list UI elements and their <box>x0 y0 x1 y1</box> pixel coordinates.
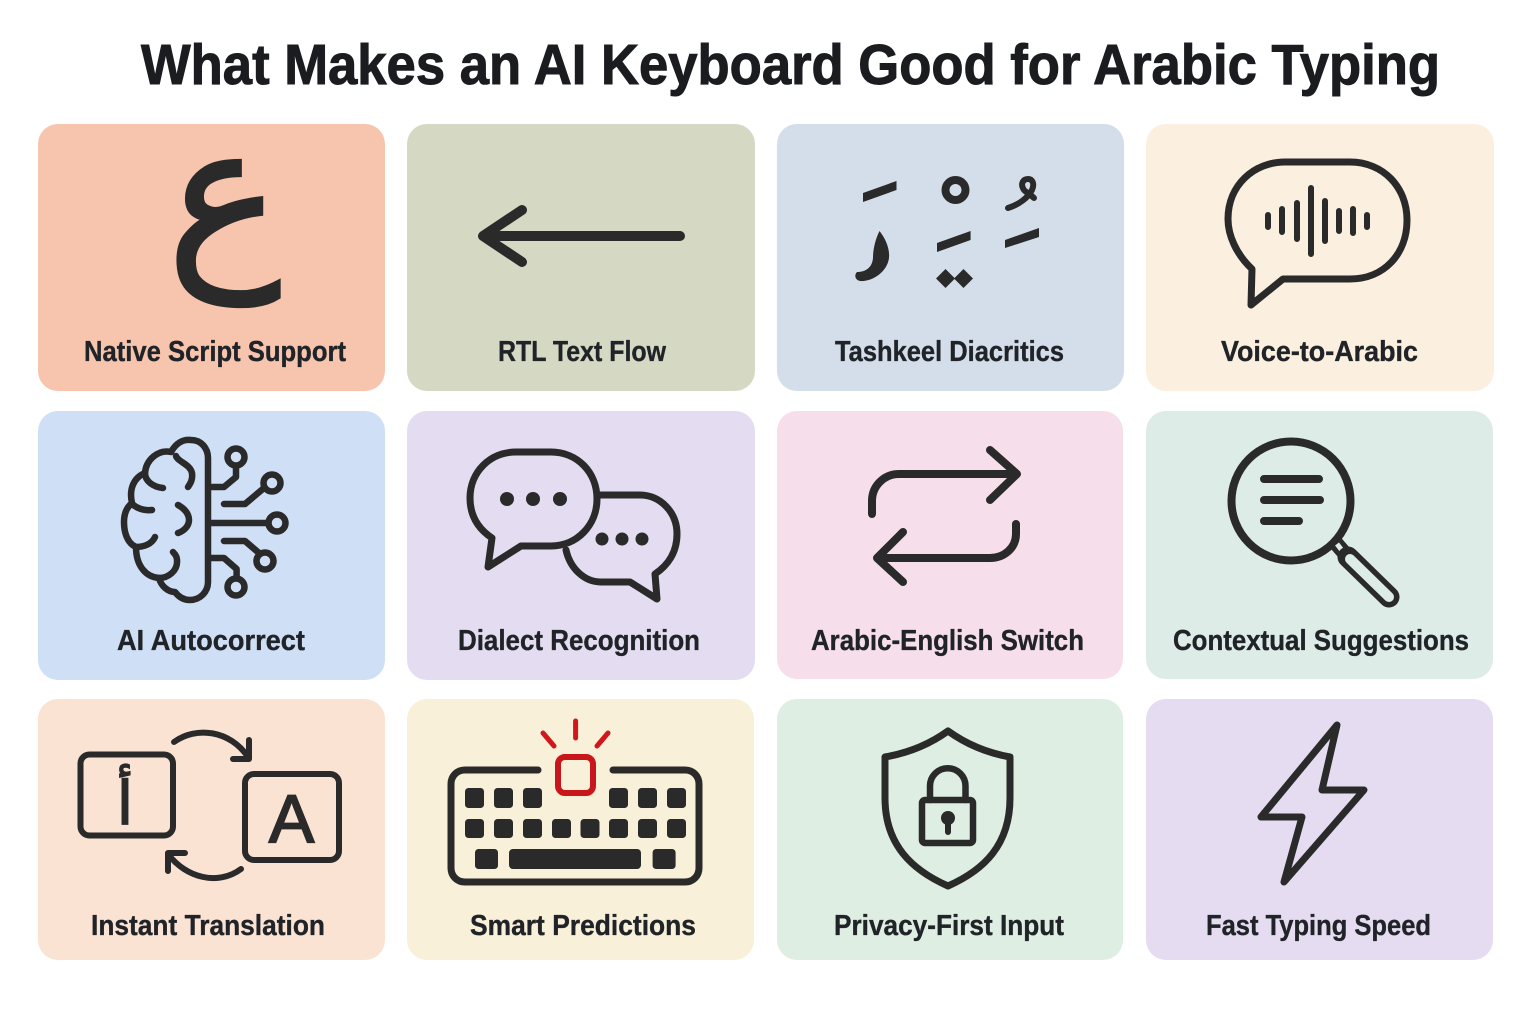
label: Privacy-First Input: Privacy-First Input <box>834 910 1064 942</box>
label: Fast Typing Speed: Fast Typing Speed <box>1206 910 1431 942</box>
title: What Makes an AI Keyboard Good for Arabic Typing <box>141 33 1440 97</box>
panel: Arabic-English Switch <box>777 411 1123 679</box>
icon: translation keys: أ <box>117 764 133 839</box>
icon: keyboard with highlighted key <box>451 721 699 882</box>
icon: translation keys: A <box>269 781 315 857</box>
panel: Fast Typing Speed <box>1146 699 1493 960</box>
icon: lightning bolt <box>1261 725 1364 882</box>
label: Native Script Support: Native Script Support <box>84 336 346 368</box>
icon: diacritic marks <box>855 179 1039 288</box>
label: Tashkeel Diacritics: Tashkeel Diacritics <box>835 336 1064 368</box>
icon: translation keys <box>80 733 339 878</box>
panel: Native Script Support <box>38 83 385 391</box>
panel: AI Autocorrect <box>38 411 385 680</box>
panel: Smart Predictions <box>407 699 754 960</box>
panel: Dialect Recognition <box>407 411 755 680</box>
icon: magnifying glass <box>1232 442 1389 597</box>
icon: AI brain circuit <box>124 440 286 600</box>
icon: two chat bubbles <box>470 452 677 599</box>
panel: Contextual Suggestions <box>1146 411 1493 679</box>
icon: left arrow <box>483 210 680 262</box>
panel: Privacy-First Input <box>777 699 1123 960</box>
panel: Instant Translation <box>38 699 385 960</box>
label: Voice-to-Arabic: Voice-to-Arabic <box>1221 336 1418 368</box>
label: Smart Predictions: Smart Predictions <box>470 910 696 942</box>
label: Arabic-English Switch: Arabic-English Switch <box>811 625 1084 657</box>
panel: Voice-to-Arabic <box>1146 124 1494 391</box>
icon: switch arrows <box>872 450 1017 582</box>
panel: RTL Text Flow <box>407 124 755 391</box>
label: Instant Translation: Instant Translation <box>91 910 325 942</box>
icon: speech bubble with waveform <box>1228 162 1407 305</box>
icon: Arabic letter ain: ع <box>167 83 281 307</box>
panel: Tashkeel Diacritics <box>777 124 1124 391</box>
label: RTL Text Flow: RTL Text Flow <box>498 336 666 368</box>
label: AI Autocorrect: AI Autocorrect <box>117 625 305 657</box>
label: Contextual Suggestions: Contextual Suggestions <box>1173 625 1469 657</box>
icon: shield with padlock <box>885 731 1010 886</box>
label: Dialect Recognition: Dialect Recognition <box>458 625 700 657</box>
